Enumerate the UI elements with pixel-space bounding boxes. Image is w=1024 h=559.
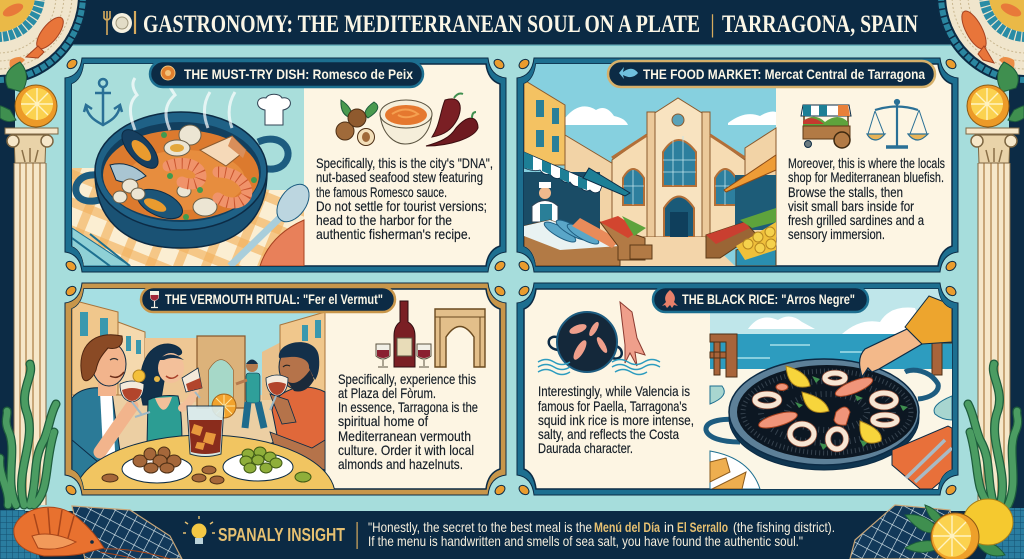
title: TARRAGONA, SPAIN bbox=[722, 11, 918, 38]
heading pill: vermouth ritual: THE VERMOUTH RITUAL: "Fer el Vermut" bbox=[165, 291, 383, 307]
right mosaic medallion with fish bbox=[936, 0, 1024, 85]
icon: orange slice bbox=[0, 62, 57, 127]
text: must-try dish description: Do not settle for tourist versions; bbox=[316, 198, 487, 214]
figure: man on left bbox=[72, 335, 132, 489]
insight label: SPANALY INSIGHT bbox=[218, 525, 345, 545]
divider bbox=[356, 522, 358, 549]
text: vermouth ritual description: culture. Order it with local bbox=[338, 442, 474, 458]
left side band bbox=[0, 46, 15, 516]
icon: bottle, glasses and roman arch bbox=[376, 301, 485, 367]
text: food market description: shop for Mediterranean bluefish. bbox=[788, 169, 944, 185]
icon: balance scale bbox=[867, 100, 928, 147]
insight quote: (the fishing district). bbox=[733, 519, 835, 535]
heading pill: food market bbox=[608, 61, 935, 87]
corner ornaments bbox=[64, 57, 958, 497]
panel: the vermouth ritual bbox=[64, 282, 506, 496]
icon: right orange slice bbox=[967, 62, 1024, 127]
right ornament: mosaic and column (mirrored) bbox=[936, 0, 1024, 505]
text: vermouth ritual description: at Plaza del Fòrum. bbox=[338, 385, 436, 401]
illustration: black rice paella bbox=[706, 289, 952, 489]
text: black rice description: famous for Paella, Tarragona's bbox=[538, 398, 687, 414]
text: vermouth ritual description: Mediterranean vermouth bbox=[338, 428, 471, 444]
text: must-try dish description: Specifically, this is the city's "DNA", bbox=[316, 155, 493, 171]
text: must-try dish description: head to the harbor for the bbox=[316, 212, 452, 228]
heading pill: black rice: THE BLACK RICE: "Arros Negre" bbox=[682, 291, 855, 307]
icon: lemons and leaves bbox=[905, 499, 1013, 559]
text: must-try dish description: nut-based seafood stew featuring bbox=[316, 169, 483, 185]
decoration: tiled sea floor right bbox=[985, 508, 1024, 559]
text: black rice description: Interestingly, while Valencia is bbox=[538, 383, 690, 399]
text: vermouth ritual description: Specifically, experience this bbox=[338, 371, 476, 387]
decoration: fishing net left bbox=[72, 506, 182, 559]
heading pill: vermouth ritual bbox=[141, 287, 395, 312]
right side band bbox=[1009, 46, 1024, 516]
text: food market description: fresh grilled sardines and a bbox=[788, 212, 924, 228]
decoration: fishing net right bbox=[850, 505, 960, 559]
heading pill: must-try dish bbox=[150, 61, 423, 87]
icon: nuts, romesco sauce, peppers bbox=[336, 94, 478, 146]
heading pill: must-try dish: THE MUST-TRY DISH: Romesco de Peix bbox=[184, 66, 413, 82]
text: food market description: Moreover, this is where the locals bbox=[788, 155, 945, 171]
right seaweed bbox=[968, 364, 1018, 505]
column bbox=[5, 128, 58, 505]
mosaic medallion with fish bbox=[0, 0, 88, 85]
text: must-try dish description: the famous Romesco sauce. bbox=[316, 184, 447, 200]
text: black rice description: salty, and reflects the Costa bbox=[538, 426, 679, 442]
heading pill: food market: THE FOOD MARKET: Mercat Central de Tarragona bbox=[643, 66, 925, 82]
insight quote: Menú del Día bbox=[594, 519, 660, 535]
glass held by left man bbox=[120, 370, 150, 417]
text: must-try dish description: authentic fisherman's recipe. bbox=[316, 226, 471, 242]
table with plates bbox=[80, 435, 335, 489]
text: vermouth ritual description: almonds and hazelnuts. bbox=[338, 456, 463, 472]
figure: person walking bbox=[236, 360, 264, 428]
illustration: seafood stew pot bbox=[72, 64, 316, 266]
text: food market description bbox=[788, 155, 945, 242]
text: must-try dish description bbox=[316, 155, 493, 242]
insight quote: If the menu is handwritten and smells of sea salt, you have found the authentic soul." bbox=[368, 533, 803, 549]
icon: black rice pan and squid bbox=[538, 302, 660, 374]
illustration: market hall bbox=[524, 64, 776, 266]
insight quote: "Honestly, the secret to the best meal is the bbox=[368, 519, 592, 535]
figure: woman in centre bbox=[140, 344, 202, 445]
text: food market description: Browse the stalls, then bbox=[788, 184, 903, 200]
icon: market cart bbox=[801, 105, 851, 148]
header band bbox=[0, 0, 1024, 46]
text: black rice description: squid ink rice is more intense, bbox=[538, 412, 694, 428]
icon: shrimp bbox=[14, 507, 170, 559]
heading pill: black rice bbox=[653, 287, 868, 312]
icon: lightbulb bbox=[183, 516, 215, 544]
title: | bbox=[710, 11, 715, 38]
left ornament: mosaic and column bbox=[0, 0, 88, 505]
insight quote bbox=[368, 519, 835, 549]
icon: plate and cutlery bbox=[104, 11, 135, 35]
text: vermouth ritual description: spiritual home of bbox=[338, 413, 428, 429]
panel: the food market bbox=[517, 58, 958, 272]
text: food market description: sensory immersion. bbox=[788, 226, 885, 242]
insight quote: in bbox=[664, 519, 674, 535]
title: GASTRONOMY: THE MEDITERRANEAN SOUL ON A PLATE bbox=[143, 11, 700, 38]
illustration: friends sharing vermouth bbox=[72, 289, 335, 489]
seaweed bbox=[0, 364, 56, 505]
panel: the must-try dish bbox=[65, 58, 506, 272]
panel: the black rice bbox=[517, 283, 958, 495]
text: vermouth ritual description bbox=[338, 371, 478, 472]
decoration: tiled sea floor left bbox=[0, 510, 40, 559]
text: vermouth ritual description: In essence, Tarragona is the bbox=[338, 399, 478, 415]
insight quote: El Serrallo bbox=[677, 519, 728, 535]
text: black rice description bbox=[538, 383, 694, 456]
right column bbox=[966, 128, 1019, 505]
text: black rice description: Daurada character. bbox=[538, 440, 633, 456]
figure: man on right bbox=[266, 342, 326, 472]
footer band bbox=[0, 499, 1024, 559]
text: food market description: visit small bars inside for bbox=[788, 198, 914, 214]
vermouth tumbler with orange bbox=[187, 394, 236, 456]
